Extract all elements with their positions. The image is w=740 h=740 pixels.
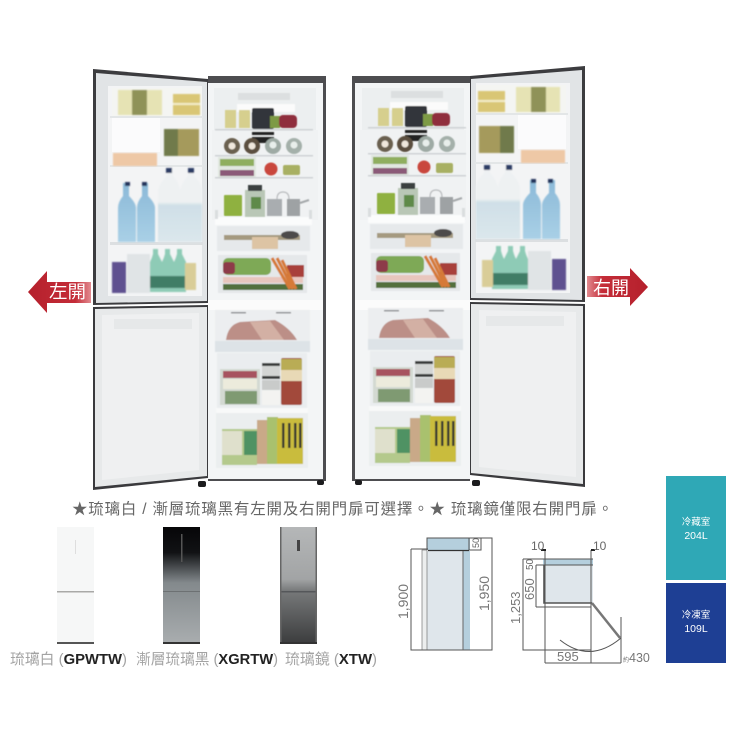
colour option: white: [57, 527, 94, 644]
colour option: mirror: [280, 527, 317, 644]
capacity bar: [666, 476, 726, 663]
open doors with door-shelf food (right): [470, 66, 585, 487]
open doors with door-shelf food (left): [93, 69, 208, 490]
650 label: 650: [522, 578, 537, 600]
label: gradient black: 漸層琉璃黑 (XGRTW): [136, 651, 278, 668]
colour labels: [10, 650, 377, 668]
food shelves (right): [368, 91, 466, 466]
freezer compartment: 冷凍室: [682, 609, 710, 621]
refrigerator compartment: 冷藏室: [682, 516, 710, 528]
right-opening refrigerator: [352, 66, 585, 487]
arrow: right opening: 右開: [593, 278, 629, 298]
1,900 height label: 1,900: [395, 584, 411, 619]
food shelves (left): [215, 93, 313, 468]
1,950 height label: 1,950: [476, 576, 492, 611]
595 width label: 595: [557, 649, 579, 664]
1,253 label: 1,253: [508, 591, 523, 624]
label: white: 琉璃白 (GPWTW): [10, 651, 127, 668]
freezer compartment: [666, 583, 726, 663]
50 label: 50: [525, 558, 536, 570]
freezer compartment: 109L: [684, 623, 708, 635]
cabinet shell (right): [352, 76, 470, 481]
50 clearance label: 50: [471, 538, 481, 548]
10 left gap: 10: [531, 539, 545, 553]
colour option: gradient black: [163, 527, 200, 644]
label: mirror: 琉璃鏡 (XTW): [285, 650, 377, 668]
dimension diagram: front view: [395, 538, 492, 650]
feet (left): [198, 480, 324, 487]
arrow: left opening: 左開: [49, 282, 86, 302]
refrigerator compartment: 204L: [684, 530, 708, 542]
10 right gap: 10: [593, 539, 607, 553]
arrow: right opening: [587, 268, 648, 306]
refrigerator compartment: [666, 476, 726, 580]
note on door options: ★琉璃白 / 漸層琉璃黑有左開及右開門扉可選擇。★ 琉璃鏡僅限右開門扉。: [72, 499, 613, 518]
left-opening refrigerator: [93, 69, 326, 490]
arrow: left opening: [28, 271, 91, 313]
dimension diagram: top view with door swing: [508, 539, 650, 665]
door swing 430 label: 約430: [623, 651, 650, 665]
feet (right): [355, 480, 480, 486]
cabinet shell (left): [208, 76, 326, 481]
